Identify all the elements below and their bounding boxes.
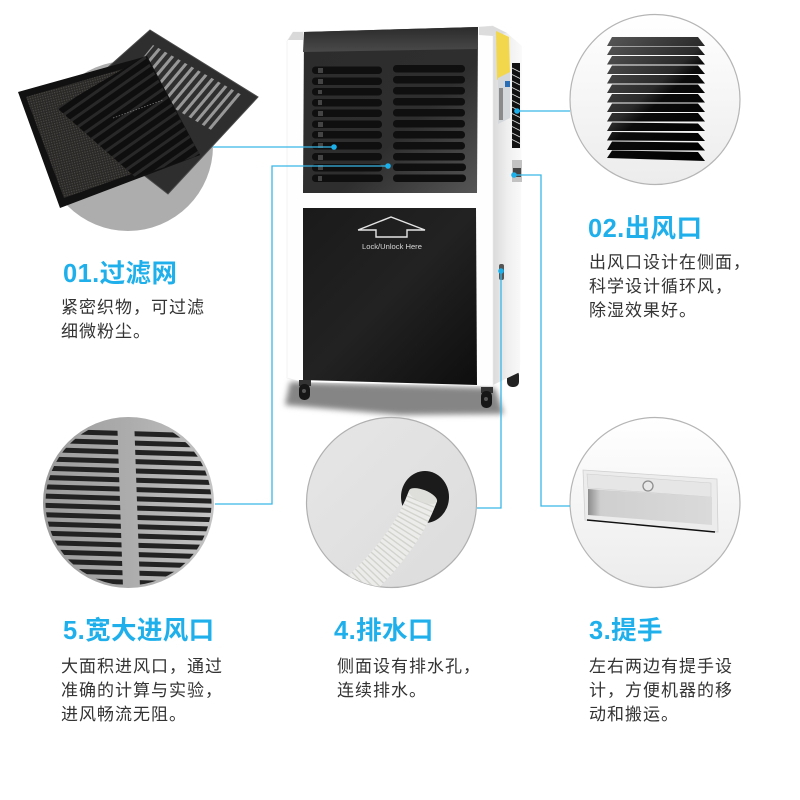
label 01 heading: 01.过滤网 <box>63 260 177 288</box>
floor shadow <box>285 382 504 415</box>
sticker blue logo <box>505 81 510 87</box>
handle shadow line <box>587 520 715 532</box>
connector: drain <box>477 268 504 508</box>
grey backing circle <box>43 61 213 231</box>
intake slats <box>46 430 212 585</box>
louvre slats <box>125 45 242 131</box>
label 5 heading: 5.宽大进风口 <box>63 617 215 645</box>
handle recess <box>588 489 712 525</box>
drain circle <box>306 418 476 588</box>
label 5 description: 大面积进风口，通过 <box>61 657 223 676</box>
yellow warning sticker <box>496 31 510 80</box>
lock label: Lock/Unlock Here <box>362 242 422 251</box>
left intake vents <box>312 66 383 182</box>
right intake vents <box>393 65 466 182</box>
label 5 description: 进风畅流无阻。 <box>61 705 187 724</box>
front left caster <box>299 380 311 400</box>
rear caster <box>507 370 519 387</box>
handle circle <box>570 418 740 588</box>
connector: outlet <box>514 108 570 114</box>
image: drain port and hose <box>306 418 476 590</box>
label 02 description: 出风口设计在侧面， <box>589 253 751 272</box>
intake circle <box>43 417 214 588</box>
drain hose <box>355 485 439 590</box>
label 02 description: 除湿效果好。 <box>589 301 697 320</box>
drain port <box>499 264 504 280</box>
label 3 description: 动和搬运。 <box>589 705 679 724</box>
label 3 heading: 3.提手 <box>589 617 663 645</box>
left vent glints <box>318 68 323 181</box>
outlet circle <box>570 14 740 184</box>
back louvre filter <box>60 30 258 194</box>
label 3 description: 计，方便机器的移 <box>589 681 733 700</box>
top band of panel <box>303 27 478 52</box>
label 4 heading: 4.排水口 <box>334 617 434 645</box>
right top cap <box>479 26 507 36</box>
left top cap <box>288 32 303 40</box>
middle slatted filter <box>57 56 200 177</box>
mesh filter <box>18 56 200 208</box>
upper black intake panel <box>303 27 478 193</box>
lower black door panel <box>303 208 477 385</box>
label 01 description: 紧密织物，可过滤 <box>61 298 205 317</box>
filter seam <box>113 100 163 118</box>
side outlet vent <box>512 63 520 148</box>
label 4 description: 连续排水。 <box>337 681 427 700</box>
connector: handle <box>511 172 570 506</box>
mesh surface <box>26 64 190 198</box>
handle top lip <box>587 474 711 497</box>
front right caster <box>481 387 493 408</box>
label 3 description: 左右两边有提手设 <box>589 657 733 676</box>
label 02 description: 科学设计循环风， <box>589 277 733 296</box>
front white frame <box>287 26 493 386</box>
handle emblem <box>643 481 653 491</box>
image: recessed handle <box>570 418 740 588</box>
lock arrow <box>358 217 425 237</box>
panel: dehumidifier machine <box>285 26 522 415</box>
outlet slats <box>607 37 705 161</box>
connector: filter <box>213 144 337 150</box>
label 02 heading: 02.出风口 <box>588 215 702 243</box>
label 5 description: 准确的计算与实验， <box>61 681 223 700</box>
white spec sticker <box>498 72 510 124</box>
image: filter panels <box>18 30 258 231</box>
side wall <box>493 33 522 385</box>
image: side outlet louvre <box>570 14 740 184</box>
handle plate <box>583 470 718 532</box>
label 4 description: 侧面设有排水孔， <box>337 657 481 676</box>
sticker barcode <box>499 88 503 120</box>
image: wide air intake <box>43 417 214 588</box>
connector: wide intake <box>215 163 391 504</box>
side handle <box>512 160 522 182</box>
rubber grommet <box>401 471 449 523</box>
label 01 description: 细微粉尘。 <box>61 322 151 341</box>
